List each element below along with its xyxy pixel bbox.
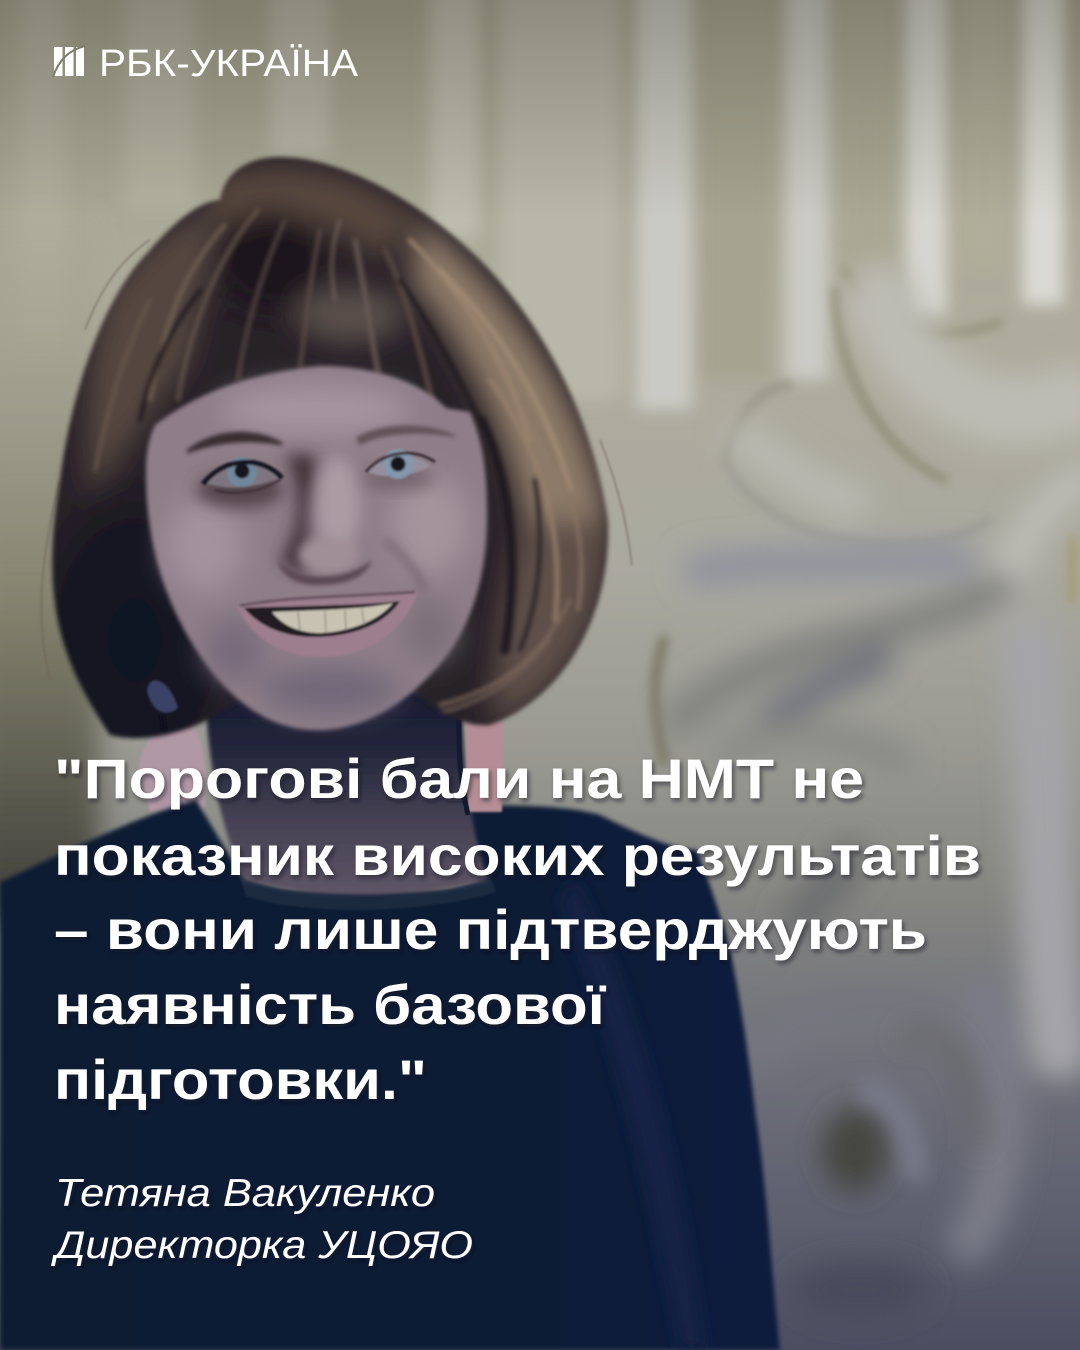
speaker name: Тетяна Вакуленко: [55, 1172, 435, 1215]
jacket and shoulders: [0, 800, 780, 1350]
photo: woman portrait: [0, 140, 780, 1350]
eye shadows: [196, 472, 284, 508]
quote: – вони лише підтверджують: [54, 898, 927, 961]
quote: наявність базової: [54, 973, 606, 1036]
earring right: [466, 722, 503, 812]
logo text: РБК-УКРАЇНА: [99, 43, 359, 85]
icon: logo mark: [53, 46, 85, 77]
speaker role: Директорка УЦОЯО: [51, 1224, 473, 1267]
earring left: [139, 721, 205, 812]
attribution: [51, 1172, 473, 1267]
hair: [49, 154, 611, 742]
logo: РБК-Україна: [53, 43, 359, 85]
mouth: [237, 592, 418, 657]
eyes: [203, 449, 435, 493]
neck: [205, 690, 488, 895]
face: [146, 366, 487, 730]
jacket fold: [560, 880, 705, 1350]
shirt band: [240, 875, 496, 910]
earring drop: [147, 680, 178, 730]
face shading: [167, 386, 468, 712]
eyebrows: [187, 433, 282, 452]
hair wisps: [41, 240, 632, 680]
quote: [54, 747, 981, 1111]
smile lines: [385, 540, 425, 590]
nose: [280, 455, 315, 572]
quote: показник високих результатів: [54, 824, 981, 887]
quote: "Порогові бали на НМТ не: [54, 747, 864, 810]
quote: підготовки.": [54, 1048, 427, 1111]
